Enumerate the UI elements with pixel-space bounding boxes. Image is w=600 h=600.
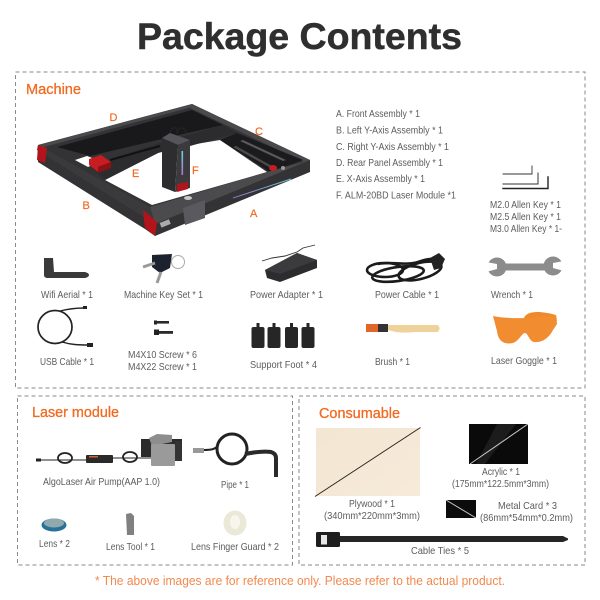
machine part letters: B <box>82 200 90 212</box>
screws <box>128 320 197 373</box>
power cable <box>367 253 445 301</box>
machine part letters: A <box>250 208 258 220</box>
machine key set <box>124 254 203 301</box>
machine part letters: C <box>255 126 263 138</box>
machine key set: Machine Key Set * 1 <box>124 289 203 301</box>
allen key labels: M2.5 Allen Key * 1 <box>490 211 561 223</box>
power adapter <box>250 245 323 301</box>
plywood: Plywood * 1 <box>349 498 395 510</box>
assembly list: A. Front Assembly * 1 <box>336 108 420 120</box>
cable tie: Cable Ties * 5 <box>411 545 469 557</box>
lens <box>39 518 70 550</box>
lens tool <box>106 513 155 553</box>
support feet: Support Foot * 4 <box>250 359 317 371</box>
brush: Brush * 1 <box>375 356 410 368</box>
panel: laser module <box>18 396 292 565</box>
power cable: Power Cable * 1 <box>375 289 439 301</box>
machine part letters: F <box>192 165 199 177</box>
plywood <box>315 428 420 522</box>
machine part letters <box>82 112 263 220</box>
footer note: * The above images are for reference only. Please refer to the actual product. <box>95 574 505 588</box>
heading: laser module: Laser module <box>32 405 119 421</box>
air pump <box>36 434 182 488</box>
assembly list: C. Right Y-Axis Assembly * 1 <box>336 141 449 153</box>
assembly list <box>336 108 456 202</box>
icon: allen keys <box>503 166 548 188</box>
screws: M4X22 Screw * 1 <box>128 361 197 373</box>
air pump: AlgoLaser Air Pump(AAP 1.0) <box>43 476 160 488</box>
title: Package Contents <box>137 16 462 57</box>
laser goggles: Laser Goggle * 1 <box>491 355 557 367</box>
laser goggles <box>491 312 557 367</box>
allen key labels <box>490 199 562 235</box>
lens finger guard: Lens Finger Guard * 2 <box>191 541 279 553</box>
lens finger guard <box>191 510 279 553</box>
metal card: (86mm*54mm*0.2mm) <box>480 512 573 524</box>
assembly list: F. ALM-20BD Laser Module *1 <box>336 190 456 202</box>
wrench: Wrench * 1 <box>491 289 533 301</box>
plywood: (340mm*220mm*3mm) <box>324 510 420 522</box>
heading: machine: Machine <box>26 82 81 98</box>
acrylic: Acrylic * 1 <box>482 466 520 478</box>
acrylic: (175mm*122.5mm*3mm) <box>452 478 549 490</box>
usb cable: USB Cable * 1 <box>40 356 94 368</box>
brush <box>366 324 440 368</box>
assembly list: D. Rear Panel Assembly * 1 <box>336 157 443 169</box>
power adapter: Power Adapter * 1 <box>250 289 323 301</box>
wrench <box>486 256 564 301</box>
wifi aerial: Wifi Aerial * 1 <box>41 289 93 301</box>
machine part letters: E <box>132 168 139 180</box>
metal card <box>446 500 573 524</box>
machine part letters: D <box>110 112 118 124</box>
allen key labels: M3.0 Allen Key * 1- <box>490 223 562 235</box>
usb cable <box>38 306 94 368</box>
screws: M4X10 Screw * 6 <box>128 349 197 361</box>
assembly list: B. Left Y-Axis Assembly * 1 <box>336 124 443 136</box>
wifi aerial <box>41 258 93 301</box>
machine frame illustration <box>37 104 310 236</box>
metal card: Metal Card * 3 <box>498 500 557 512</box>
assembly list: E. X-Axis Assembly * 1 <box>336 173 425 185</box>
pipe: Pipe * 1 <box>221 479 249 491</box>
allen key labels: M2.0 Allen Key * 1 <box>490 199 561 211</box>
cable tie <box>316 532 568 557</box>
support feet <box>250 323 317 371</box>
acrylic <box>452 424 549 490</box>
pipe <box>193 434 276 491</box>
lens tool: Lens Tool * 1 <box>106 541 155 553</box>
lens: Lens * 2 <box>39 538 70 550</box>
panel: machine <box>16 72 585 388</box>
panel: consumable <box>299 396 585 565</box>
heading: consumable: Consumable <box>319 406 400 422</box>
